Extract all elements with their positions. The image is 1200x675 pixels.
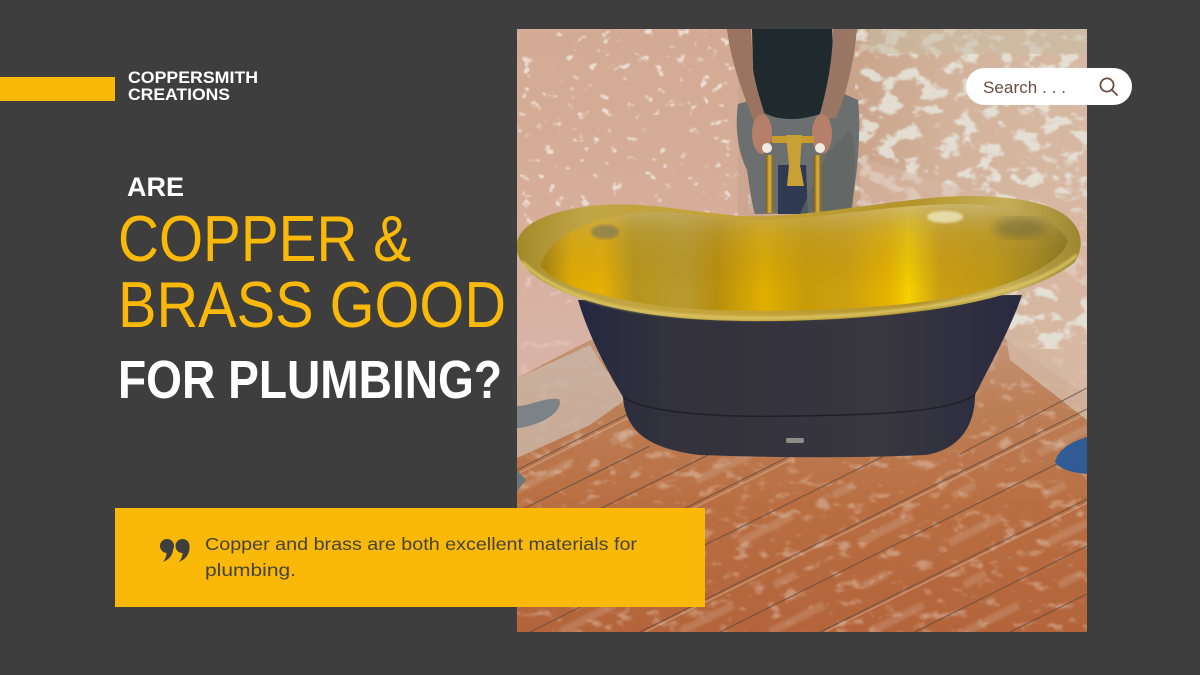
right wall: [800, 29, 1087, 399]
callout text: plumbing.: [205, 560, 296, 580]
floorboard lines: [517, 388, 1087, 632]
search box: [966, 68, 1132, 105]
icon: magnifier: [1100, 78, 1117, 95]
title: [118, 172, 506, 410]
hands: [752, 114, 772, 154]
brand name: CREATIONS: [128, 85, 230, 104]
shoes: [517, 399, 1087, 491]
man: [727, 29, 859, 214]
brand bar: [0, 77, 115, 101]
trousers: [737, 90, 859, 214]
tub rim and bowl: [517, 196, 1081, 321]
icon: quotation mark: [160, 539, 190, 562]
floor: [517, 338, 1087, 632]
search box: Search . . .: [983, 78, 1066, 97]
title: FOR PLUMBING?: [118, 350, 502, 410]
photo: brass bathtub: [517, 29, 1087, 632]
callout text: [205, 534, 637, 580]
right arm: [818, 29, 857, 120]
title: ARE: [127, 172, 184, 202]
shirt: [752, 29, 835, 119]
title: COPPER &: [118, 202, 411, 275]
tub badge: [786, 438, 804, 443]
callout: [115, 508, 705, 607]
brand name: [128, 68, 258, 104]
faucet: [762, 135, 825, 213]
left arm: [727, 29, 765, 122]
brand name: COPPERSMITH: [128, 68, 258, 87]
dust streaks along the boards: [517, 408, 1087, 632]
title: BRASS GOOD: [118, 268, 506, 341]
left wall: [517, 29, 802, 389]
callout text: Copper and brass are both excellent materials for: [205, 534, 637, 554]
tub body: [578, 295, 1022, 457]
